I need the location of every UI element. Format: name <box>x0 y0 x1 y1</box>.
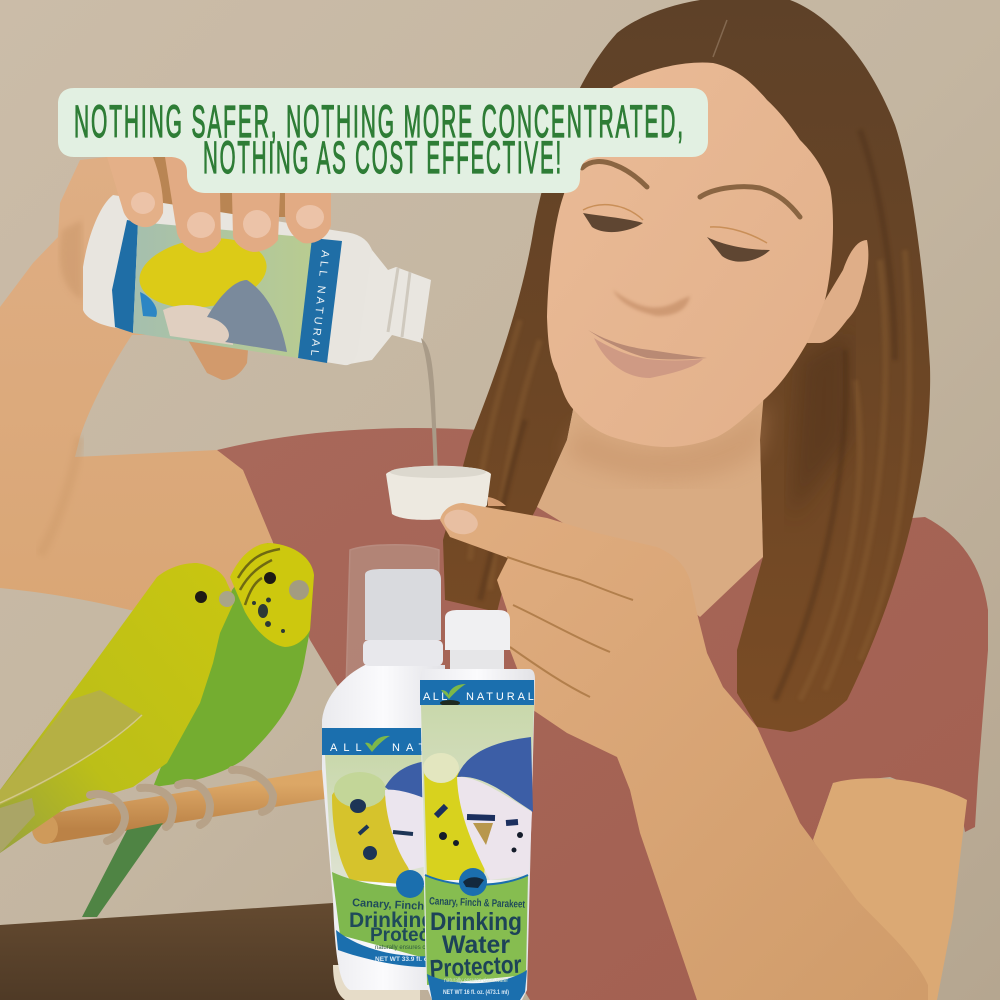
bird beak <box>473 823 493 845</box>
thumb under bottle <box>188 340 248 380</box>
right blue band <box>298 238 342 363</box>
badge <box>396 870 424 898</box>
foot 2 <box>140 788 173 827</box>
badge <box>459 868 487 896</box>
finger 2 <box>165 157 221 253</box>
yellow bird head <box>334 772 386 808</box>
white bird <box>163 305 233 345</box>
face <box>547 63 833 447</box>
ear <box>807 240 868 343</box>
fingers on bottle <box>107 157 331 253</box>
leaf logo <box>365 736 390 752</box>
headline banner: NOTHING AS COST EFFECTIVE! <box>203 132 563 183</box>
tilted bottle held by woman <box>83 195 431 365</box>
head stripes <box>238 549 280 605</box>
green panel <box>425 875 528 985</box>
blue bird face <box>457 777 532 880</box>
arm crease <box>40 437 80 555</box>
blue band <box>322 728 432 755</box>
finger 4 <box>285 193 331 243</box>
soil mound <box>440 700 460 706</box>
net weight: NET WT 33.9 fl. oz. <box>375 956 433 963</box>
blue bird crown <box>457 737 533 812</box>
throat spots <box>252 598 285 633</box>
perch end <box>32 814 58 844</box>
hair strands <box>470 130 909 700</box>
green budgerigar <box>82 543 314 917</box>
measuring cup <box>386 466 491 520</box>
woman head <box>443 0 930 732</box>
net weight: NET WT 16 fl. oz. (473.1 ml) <box>443 989 509 996</box>
fingernails <box>131 192 324 238</box>
wing edge <box>0 715 142 803</box>
body <box>322 665 445 990</box>
tagline: naturally ensures clean water <box>444 977 509 984</box>
table <box>0 903 345 1000</box>
pouring stream <box>421 338 438 475</box>
cap <box>365 569 441 640</box>
label picture <box>133 222 315 358</box>
cup inner <box>390 466 486 478</box>
large bottle <box>322 545 485 1000</box>
blue bird <box>385 760 432 800</box>
finger 1 <box>107 157 163 227</box>
yellow budgerigar <box>0 563 235 853</box>
canary text: Canary, Finch & Parakeet <box>429 895 526 911</box>
green panel <box>332 872 432 960</box>
product name 2: Protector <box>370 925 455 946</box>
tail <box>82 823 163 917</box>
perch <box>46 784 326 829</box>
blue lower band <box>336 930 432 967</box>
left blue band <box>112 220 138 333</box>
eye <box>264 572 276 584</box>
thread lines <box>388 268 410 337</box>
label picture <box>325 755 432 885</box>
yellow mask <box>230 543 314 647</box>
spots <box>439 832 447 840</box>
body <box>420 669 535 1000</box>
finger creases <box>507 557 633 697</box>
panel stripe <box>425 875 528 885</box>
foot 1 <box>90 794 125 841</box>
bird feet <box>90 770 273 841</box>
cere <box>289 580 309 600</box>
body <box>0 563 235 853</box>
neck <box>450 650 504 670</box>
protector: Protector <box>429 951 522 983</box>
band text: ALL <box>423 691 450 703</box>
finger 3 <box>232 193 280 252</box>
wrist shading <box>60 220 82 300</box>
thumb tip behind cup <box>488 497 506 506</box>
tagline: naturally ensures clean water <box>375 945 453 951</box>
cap <box>445 610 510 650</box>
blue eyebrow marks <box>436 806 518 823</box>
bird silhouette <box>463 877 484 888</box>
product text: Canary, Finch & <box>352 897 435 913</box>
index nail <box>442 507 480 537</box>
left brow <box>582 162 647 187</box>
drinking: Drinking <box>430 908 522 936</box>
right eyelid <box>710 227 767 243</box>
lower lip <box>594 338 703 378</box>
dark hair under ear <box>790 330 850 520</box>
banner shape <box>58 88 708 193</box>
shirt <box>217 428 988 1000</box>
left arm <box>0 157 300 630</box>
left eye <box>583 213 643 232</box>
right brow <box>700 187 800 217</box>
bird markings <box>352 801 413 858</box>
collar <box>363 640 443 666</box>
body <box>153 543 314 787</box>
blue band <box>420 680 534 705</box>
hair <box>443 0 930 732</box>
spot 3 <box>517 832 523 838</box>
band text 2: NATURAL <box>466 691 537 703</box>
shadow between fingers <box>150 157 330 217</box>
right eye <box>707 237 770 262</box>
small bottle <box>420 610 537 1000</box>
left eyelid <box>583 205 643 220</box>
neck shadow <box>565 400 770 481</box>
cere <box>219 591 235 607</box>
leaf logo <box>441 684 466 699</box>
glass <box>346 545 439 690</box>
blue bird face <box>385 790 432 870</box>
blue spot <box>140 292 157 317</box>
foot 3 <box>178 783 210 825</box>
product name: Drinking <box>349 909 434 932</box>
upper lip <box>588 330 707 360</box>
spot 4 <box>512 848 516 852</box>
spot 2 <box>453 840 459 846</box>
tail feathers <box>0 798 35 853</box>
eye <box>195 591 207 603</box>
arm and hand back <box>0 157 300 630</box>
upper right arm <box>813 778 967 1000</box>
base <box>333 965 420 1000</box>
wing <box>0 690 142 805</box>
yellow bird <box>424 761 485 880</box>
hair part <box>713 20 727 57</box>
band text: ALL <box>330 742 368 754</box>
bottle neck and threads <box>344 250 431 365</box>
yellow bird <box>332 778 415 885</box>
yellow bird crown <box>423 753 459 783</box>
band second word: NATURAL <box>392 742 485 754</box>
right hand and forearm <box>440 503 928 1000</box>
headline banner <box>58 88 708 193</box>
foot 4 <box>232 770 273 812</box>
mirrored label text: ALL NATURAL <box>308 250 331 356</box>
label picture <box>421 705 534 880</box>
blue bird <box>207 280 287 352</box>
bottle body <box>83 195 372 365</box>
neck and chest <box>537 380 765 617</box>
water: Water <box>442 931 510 959</box>
yellow bird <box>135 230 271 316</box>
nose shading <box>613 290 690 316</box>
lower blue band <box>427 970 527 1000</box>
